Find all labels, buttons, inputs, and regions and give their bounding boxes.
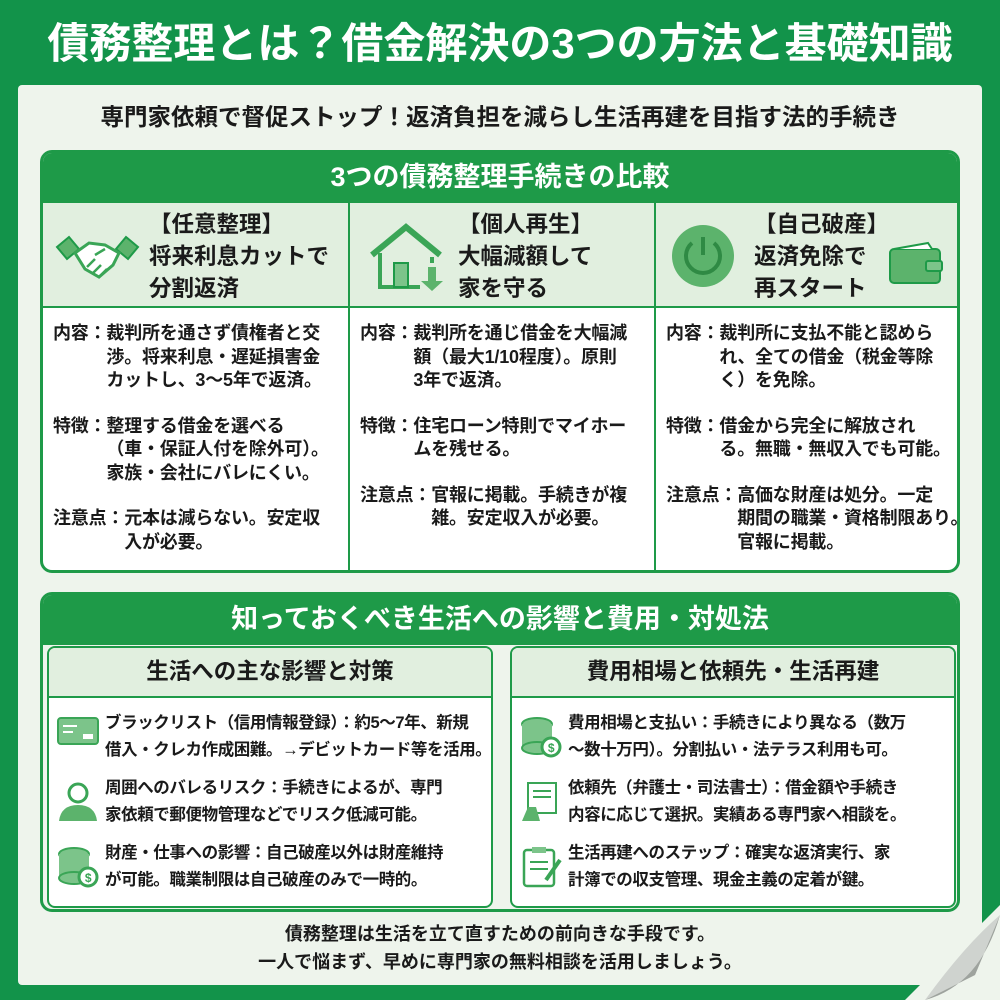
body text: （車・保証人付を除外可）。: [106, 439, 329, 459]
page curl: [905, 905, 1000, 1000]
column: 自己破産: 裁判所に支払不能と認めら: [719, 323, 933, 343]
subpanel: costs: 費用相場と依頼先・生活再建: [587, 659, 879, 684]
column: 個人再生: ムを残せる。: [413, 439, 520, 459]
comparison header: [43, 153, 957, 203]
item: rebuilding: [522, 844, 890, 889]
item: exposure risk: 周囲へのバレるリスク：手続きによるが、専門: [105, 779, 442, 797]
body text: 元本は減らない。安定収: [124, 508, 320, 528]
column: 自己破産: 注意点：: [666, 484, 737, 504]
subpanel heading: 生活への主な影響と対策: [146, 659, 394, 684]
footer message: 一人で悩まず、早めに専門家の無料相談を活用しましょう。: [258, 952, 742, 972]
column: 個人再生: 家を守る: [458, 276, 548, 301]
column: 個人再生: [350, 203, 656, 573]
body text: 注意点：: [53, 508, 124, 528]
item: blacklist: [57, 714, 491, 759]
icon: house: [370, 223, 443, 291]
column: 個人再生: 額（最大1/10程度）。原則: [413, 346, 617, 366]
column: 自己破産: 高価な財産は処分。一定: [737, 484, 933, 504]
header text: 【任意整理】: [149, 212, 284, 237]
column: 自己破産: 再スタート: [754, 276, 867, 301]
column: 自己破産: 借金から完全に解放され: [719, 416, 915, 436]
column: 自己破産: [656, 203, 960, 552]
item: property: 財産・仕事への影響：自己破産以外は財産維持: [105, 844, 443, 862]
body text: 特徴：: [53, 416, 106, 436]
item: exposure risk: 家依頼で郵便物管理などでリスク低減可能。: [105, 806, 427, 824]
body text: カットし、3〜5年で返済。: [106, 370, 322, 390]
column: 自己破産: く）を免除。: [719, 370, 826, 390]
item: lawyer: [522, 778, 906, 824]
item: property: が可能。職業制限は自己破産のみで一時的。: [105, 871, 427, 889]
header text: [149, 212, 329, 301]
panel: life impact and costs: [40, 592, 960, 912]
footer message: [258, 924, 742, 972]
column: 個人再生: 内容：: [360, 323, 413, 343]
item: property: $: [85, 871, 92, 885]
icon: power button: [672, 225, 734, 287]
body text: [53, 323, 329, 552]
column header: [43, 203, 348, 308]
item: blacklist: ブラックリスト（信用情報登録）：約5〜7年、新規: [105, 714, 469, 732]
column: 任意整理: [43, 203, 350, 573]
icon: wallet: [889, 242, 943, 284]
subpanel heading: [49, 648, 491, 698]
item: cost: 費用相場と支払い：手続きにより異なる（数万: [568, 714, 906, 732]
item: cost: 〜数十万円）。分割払い・法テラス利用も可。: [568, 741, 898, 759]
footer message: 債務整理は生活を立て直すための前向きな手段です。: [285, 924, 715, 944]
item: blacklist: 借入・クレカ作成困難。→デビットカード等を活用。: [105, 741, 491, 759]
impact header: 知っておくべき生活への影響と費用・対処法: [231, 604, 769, 634]
column: 自己破産: 特徴：: [666, 416, 719, 436]
item: exposure risk: [59, 778, 442, 824]
body text: 内容：: [53, 323, 106, 343]
column: 個人再生: 【個人再生】: [458, 212, 593, 237]
item: lawyer: 内容に応じて選択。実績ある専門家へ相談を。: [568, 806, 906, 824]
column: 自己破産: 【自己破産】: [754, 212, 889, 237]
body text: 整理する借金を選べる: [106, 416, 284, 436]
column: 自己破産: れ、全ての借金（税金等除: [719, 346, 933, 366]
item: rebuilding: 生活再建へのステップ：確実な返済実行、家: [568, 844, 890, 862]
column: 個人再生: 注意点：: [360, 484, 431, 504]
column: 個人再生: 大幅減額して: [458, 244, 592, 269]
header text: 分割返済: [149, 276, 239, 301]
impact header: [43, 595, 957, 645]
column: 個人再生: 官報に掲載。手続きが複: [431, 484, 627, 504]
icon: handshake: [56, 236, 140, 279]
column: 自己破産: 官報に掲載。: [737, 532, 844, 552]
column: 個人再生: 特徴：: [360, 416, 413, 436]
item: cost: [521, 714, 906, 759]
column: 自己破産: 返済免除で: [754, 244, 867, 269]
panel: comparison: [40, 150, 960, 573]
column: 自己破産: 内容：: [666, 323, 719, 343]
item: cost: $: [548, 741, 555, 755]
item: property: [58, 844, 443, 889]
column: 個人再生: 裁判所を通じ借金を大幅減: [413, 323, 627, 343]
column: 個人再生: 住宅ローン特則でマイホー: [413, 416, 626, 436]
column: 個人再生: 雑。安定収入が必要。: [431, 508, 609, 528]
subpanel: impacts: [47, 646, 493, 908]
item: rebuilding: 計簿での収支管理、現金主義の定着が鍵。: [568, 871, 874, 889]
subpanel: costs: [510, 646, 956, 908]
header text: 将来利息カットで: [149, 244, 329, 269]
title: 債務整理とは？借金解決の3つの方法と基礎知識: [47, 20, 953, 67]
body text: 家族・会社にバレにくい。: [106, 462, 320, 482]
comparison header: 3つの債務整理手続きの比較: [330, 162, 670, 192]
body text: 渉。将来利息・遅延損害金: [106, 346, 320, 366]
body text: 入が必要。: [124, 532, 213, 552]
column: 自己破産: る。無職・無収入でも可能。: [719, 439, 951, 459]
item: lawyer: 依頼先（弁護士・司法書士）：借金額や手続き: [568, 779, 898, 797]
column: 個人再生: 3年で返済。: [413, 370, 512, 390]
subtitle: 専門家依頼で督促ストップ！返済負担を減らし生活再建を目指す法的手続き: [100, 104, 900, 130]
body text: 裁判所を通さず債権者と交: [106, 323, 320, 343]
